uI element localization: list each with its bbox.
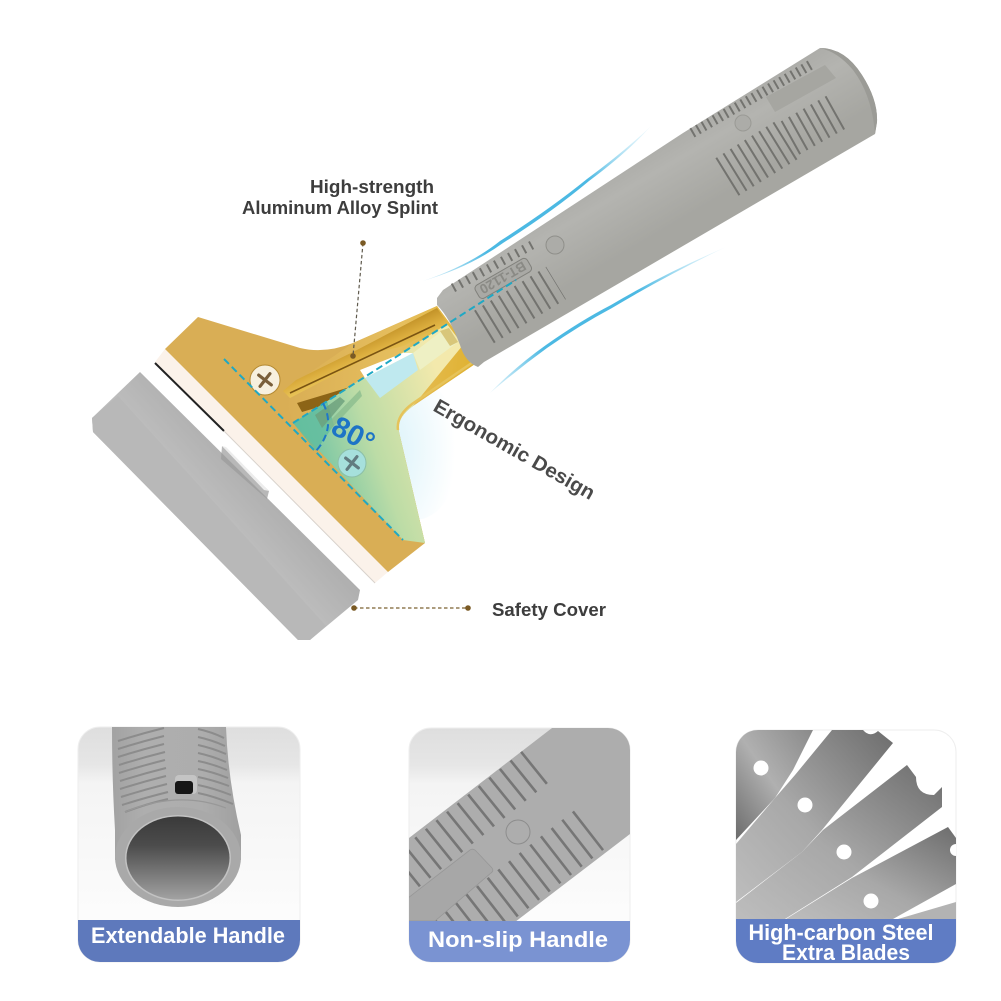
- polished strip: [283, 308, 447, 398]
- handle: [437, 48, 877, 367]
- handle tube: [112, 727, 241, 907]
- handle close-up: [409, 728, 630, 921]
- card: non-slip handle: [405, 728, 630, 962]
- banner: extendable handle: [78, 920, 300, 962]
- angle guide lines: [224, 280, 516, 540]
- callout: ergonomic design: Ergonomic Design: [430, 395, 598, 505]
- card: extra blades: [736, 730, 962, 965]
- motion line: upper: [423, 126, 651, 281]
- angle overlay: [293, 324, 463, 543]
- callout: aluminum splint: High-strength: [310, 177, 434, 197]
- blade fan: [736, 730, 962, 919]
- cut-out window: [365, 353, 418, 398]
- callout: safety cover: [351, 600, 606, 620]
- banner: extra blades: High-carbon Steel: [748, 920, 934, 945]
- motion line: lower: [490, 247, 726, 393]
- callout: safety cover: Safety Cover: [492, 600, 606, 620]
- screw: bottom: [338, 449, 366, 477]
- callout: aluminum splint: Aluminum Alloy Splint: [242, 198, 438, 218]
- product: scraper: [92, 48, 877, 640]
- callout: aluminum splint: [242, 177, 438, 359]
- blade: [155, 349, 388, 583]
- card: extendable handle: [78, 727, 300, 962]
- banner: non-slip handle: [409, 921, 630, 962]
- screw: top: [250, 365, 280, 395]
- banner: extra blades: Extra Blades: [782, 940, 910, 965]
- angle value: 80°: [326, 411, 380, 459]
- banner: non-slip handle: Non-slip Handle: [428, 927, 608, 952]
- aluminum splint body: [165, 306, 478, 572]
- banner: extra blades: [736, 919, 956, 965]
- banner: extendable handle: Extendable Handle: [91, 923, 285, 948]
- glow behind arm: [370, 380, 460, 520]
- safety cover: [92, 372, 360, 640]
- slot in splint: [290, 325, 435, 393]
- handle label plate: BT-1120: [477, 258, 529, 297]
